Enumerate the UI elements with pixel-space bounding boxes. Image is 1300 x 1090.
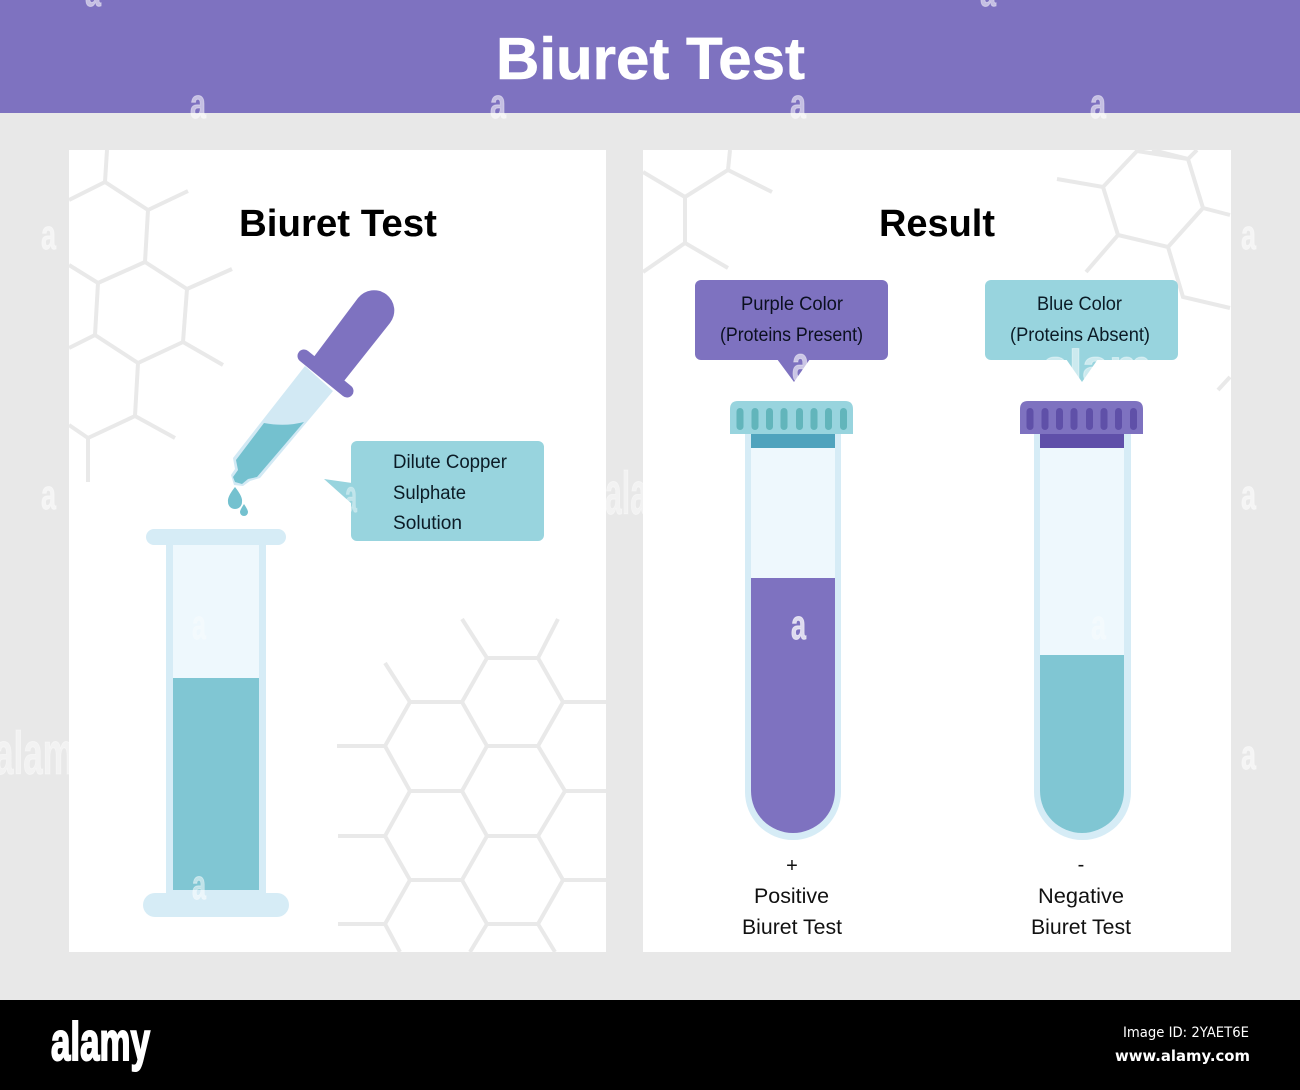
watermark marks: a	[1241, 471, 1256, 518]
callout: dilute copper sulphate solution	[324, 441, 544, 541]
test tube: negative	[1020, 401, 1143, 840]
callout: dilute copper sulphate solution: Dilute Copper	[393, 452, 508, 473]
watermark marks: a	[345, 470, 357, 522]
footer logo: alamy	[51, 1012, 150, 1072]
callout: dilute copper sulphate solution: Solution	[393, 513, 462, 534]
test tube: positive	[730, 401, 853, 840]
label: positive biuret test: +	[786, 855, 798, 877]
watermark marks: a	[790, 80, 806, 127]
label: negative biuret test: Biuret Test	[1031, 916, 1131, 939]
image id: Image ID: 2YAET6E	[1123, 1025, 1249, 1041]
title: Biuret Test	[496, 26, 805, 92]
watermark marks: a	[192, 601, 206, 648]
label: negative biuret test	[1031, 854, 1131, 939]
watermark marks: a	[792, 336, 810, 392]
callout: dilute copper sulphate solution: Sulphate	[393, 483, 466, 504]
panel: result	[643, 150, 1231, 952]
label: negative biuret test: -	[1078, 854, 1084, 876]
watermark marks: ala	[605, 460, 647, 527]
label: positive biuret test: Biuret Test	[742, 916, 842, 939]
callout: blue color: Blue Color	[1037, 294, 1123, 315]
callout: purple color: Purple Color	[741, 294, 844, 315]
panel heading: result: Result	[879, 203, 995, 245]
callout: purple color: (Proteins Present)	[720, 325, 863, 346]
watermark marks: a	[1090, 80, 1106, 127]
watermark marks: a	[490, 80, 506, 127]
watermark marks: a	[1241, 211, 1256, 258]
watermark marks: a	[1241, 731, 1256, 778]
callout: blue color	[985, 280, 1178, 382]
header banner	[0, 0, 1300, 113]
website: www.alamy.com	[1115, 1047, 1250, 1065]
panel heading: biuret test: Biuret Test	[239, 203, 437, 245]
watermark marks: a	[1091, 601, 1106, 648]
label: positive biuret test	[742, 855, 842, 939]
label: negative biuret test: Negative	[1038, 885, 1124, 908]
panel: biuret test procedure	[69, 150, 606, 952]
label: positive biuret test: Positive	[754, 885, 829, 908]
watermark marks: alam	[1042, 340, 1152, 392]
footer bar	[0, 1000, 1300, 1090]
watermark marks: a	[192, 861, 206, 908]
watermark marks: a	[791, 601, 806, 648]
callout: blue color: (Proteins Absent)	[1010, 325, 1150, 346]
watermark marks: a	[190, 80, 206, 127]
watermark marks: a	[41, 211, 56, 258]
graduated cylinder	[143, 529, 289, 917]
watermark marks: a	[41, 471, 56, 518]
callout: purple color	[695, 280, 888, 382]
icon: dropper	[228, 290, 394, 516]
